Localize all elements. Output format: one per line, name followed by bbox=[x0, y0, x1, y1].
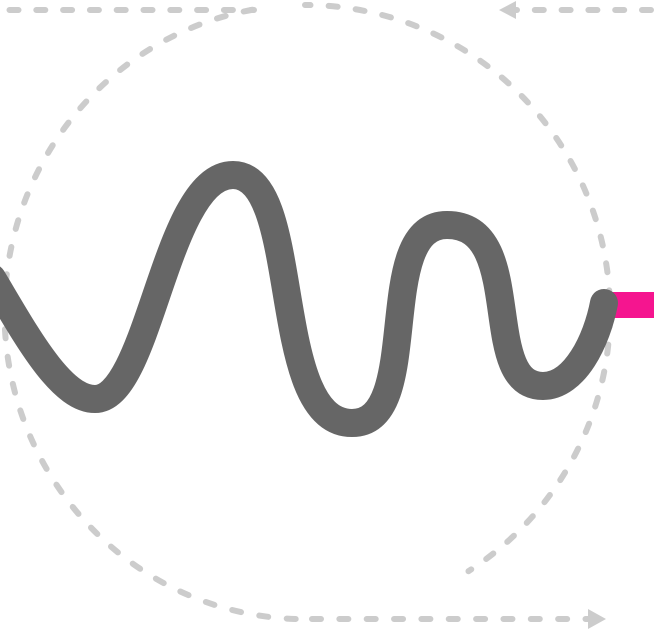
gray wave line bbox=[0, 175, 604, 423]
dashed arc: upper right of loop bbox=[305, 5, 610, 571]
dashed arrow: top right pointing left bbox=[499, 1, 651, 19]
pink output bar bbox=[612, 292, 654, 318]
dashed line: top left incoming bbox=[10, 7, 254, 13]
